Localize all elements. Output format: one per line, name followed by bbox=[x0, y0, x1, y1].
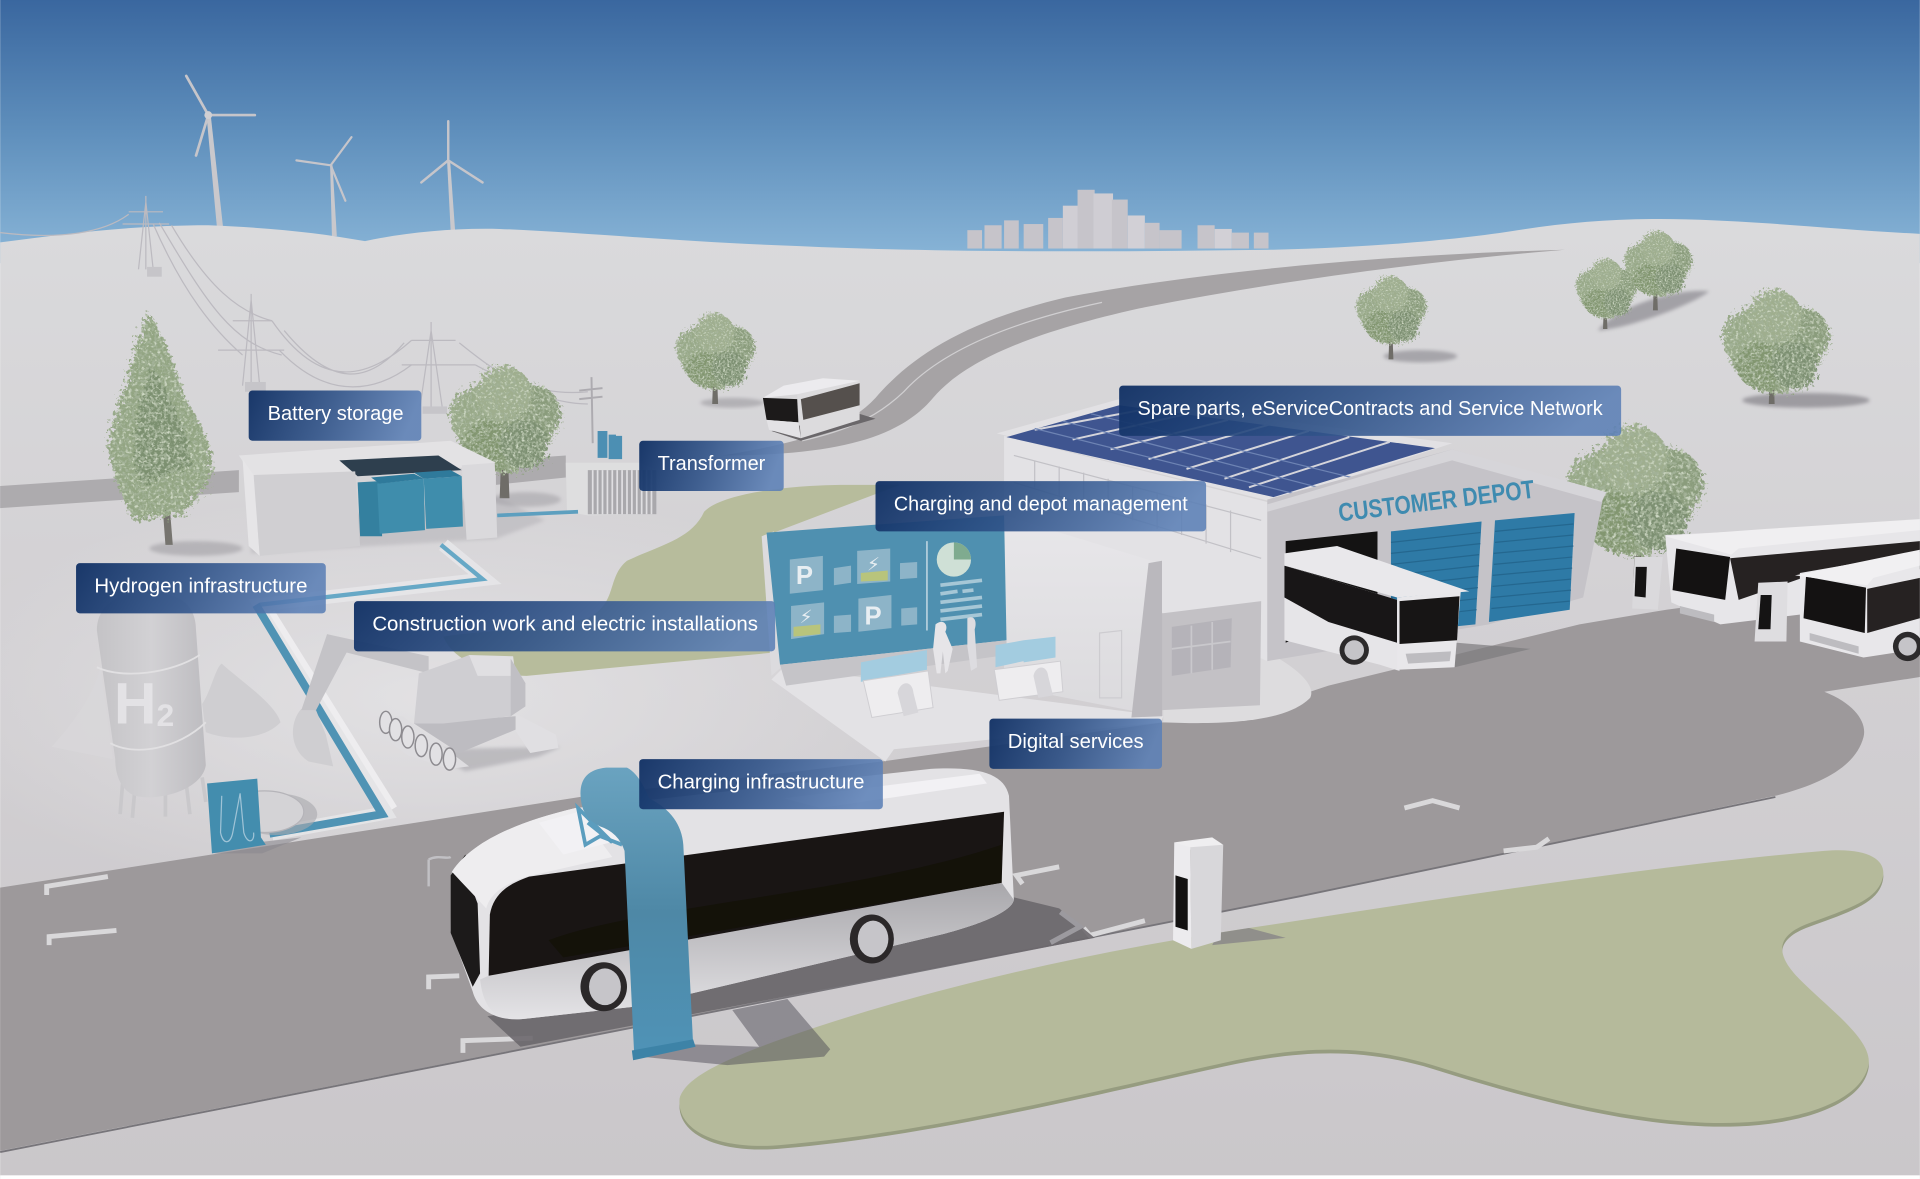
excavator near track bbox=[377, 716, 469, 769]
hydrogen symbol: H bbox=[114, 672, 156, 737]
screen divider bbox=[926, 541, 928, 631]
city skyline bbox=[967, 190, 1269, 249]
label: charging and depot management bbox=[876, 481, 1206, 531]
service small bus on back road bbox=[763, 378, 876, 441]
bottom white strip bbox=[0, 1175, 1920, 1179]
upper grass patch bbox=[443, 485, 900, 676]
screen letters: P bbox=[796, 562, 813, 590]
lower grass patch bbox=[679, 850, 1883, 1150]
sky background bbox=[0, 0, 1920, 263]
parking bay markings bbox=[47, 801, 1549, 1053]
power pylons and lines bbox=[0, 196, 588, 406]
bus wheels bbox=[580, 962, 627, 1011]
screen tiles bbox=[790, 548, 917, 639]
label: battery storage: Battery storage bbox=[268, 403, 404, 425]
label: spare parts bbox=[1119, 386, 1621, 436]
depot apron bbox=[1163, 649, 1311, 723]
depot roller door right bbox=[1489, 513, 1575, 622]
fleet bus rear bbox=[1665, 519, 1920, 624]
label: hydrogen infrastructure: Hydrogen infrastructure bbox=[94, 576, 307, 598]
depot sign: CUSTOMER DEPOT bbox=[1337, 476, 1536, 528]
excavator boom bbox=[301, 634, 429, 710]
charger in front of fleet bbox=[1755, 582, 1788, 642]
tree: centre hill bbox=[1356, 276, 1457, 362]
pylon base blocks bbox=[147, 267, 447, 414]
digital screen bbox=[762, 515, 1007, 686]
depot open door bbox=[1286, 531, 1377, 643]
tree: right hill single bbox=[1722, 290, 1870, 408]
wall behind digital screen bbox=[1004, 515, 1162, 717]
annex building bbox=[1162, 601, 1261, 710]
kerb line bbox=[0, 797, 1775, 1152]
digital screen: ⚡ bbox=[800, 607, 813, 628]
bus side windows bbox=[489, 812, 1004, 976]
depot gable wall bbox=[1267, 449, 1604, 661]
screen pie chart bbox=[937, 542, 971, 577]
label: digital services: Digital services bbox=[1008, 731, 1144, 753]
label: construction work bbox=[354, 601, 775, 651]
hydrogen dispenser bbox=[207, 779, 301, 853]
depot roller door middle bbox=[1391, 522, 1482, 633]
solar roof panels bbox=[997, 399, 1452, 502]
tree: near back road bbox=[676, 314, 764, 408]
excavator bbox=[293, 634, 561, 771]
tree: behind depot bbox=[1567, 426, 1703, 583]
main road and turnaround bbox=[0, 575, 1920, 1151]
excavator far track bbox=[516, 714, 558, 753]
roof battery packs bbox=[539, 774, 987, 855]
wind turbines bbox=[186, 76, 483, 255]
battery storage building bbox=[239, 441, 545, 556]
hydrogen manhole disc bbox=[225, 791, 317, 835]
left ground light area bbox=[0, 490, 943, 906]
label: transformer: Transformer bbox=[658, 453, 766, 475]
back winding road bbox=[722, 250, 1565, 455]
transformer bbox=[566, 431, 656, 515]
charger behind fleet bbox=[1632, 557, 1663, 610]
bay marking in bus shadow bbox=[1051, 912, 1080, 943]
label: construction work: Construction work and electric installations bbox=[372, 614, 758, 636]
label: charging infrastructure bbox=[639, 759, 883, 809]
ground charger bbox=[1173, 837, 1286, 949]
label: spare parts: Spare parts, eServiceContracts and Service Network bbox=[1138, 398, 1604, 420]
tree: round behind battery bbox=[449, 366, 561, 507]
screen text lines bbox=[940, 580, 982, 619]
gantry shadow on ground bbox=[640, 999, 830, 1065]
label: hydrogen infrastructure bbox=[76, 563, 326, 613]
hydrogen tank with mounds bbox=[52, 593, 281, 818]
label: charging infrastructure: Charging infrastructure bbox=[658, 771, 865, 793]
left road strip bbox=[0, 455, 566, 508]
depot building bbox=[997, 399, 1606, 661]
fleet bus front bbox=[1795, 550, 1920, 661]
bus windshield bbox=[451, 855, 480, 987]
utility pole bbox=[579, 377, 603, 443]
excavator cab bbox=[414, 655, 525, 724]
label: battery storage bbox=[249, 391, 421, 441]
trees: right hill pair bbox=[1576, 231, 1709, 331]
depot bus bbox=[1284, 546, 1531, 671]
operators and desks bbox=[861, 617, 1063, 717]
excavator bucket bbox=[293, 709, 333, 766]
digital screen: ⚡ bbox=[867, 555, 880, 576]
label: transformer bbox=[639, 441, 784, 491]
screen battery bars bbox=[793, 571, 888, 637]
label: charging and depot management: Charging and depot management bbox=[894, 494, 1188, 516]
charging gantry bbox=[578, 768, 696, 1060]
excavator undercarriage bbox=[414, 716, 516, 753]
main electric bus bbox=[429, 768, 1014, 1019]
hydrogen symbol: 2 bbox=[156, 697, 174, 733]
digital services floor bbox=[771, 667, 1163, 762]
digital screen: P bbox=[865, 602, 882, 630]
label: digital services bbox=[989, 719, 1162, 769]
bus shadow on road bbox=[487, 897, 1095, 1047]
tree: conifer bbox=[108, 312, 243, 556]
buried pipe to transformer and hydrogen bbox=[256, 512, 578, 834]
